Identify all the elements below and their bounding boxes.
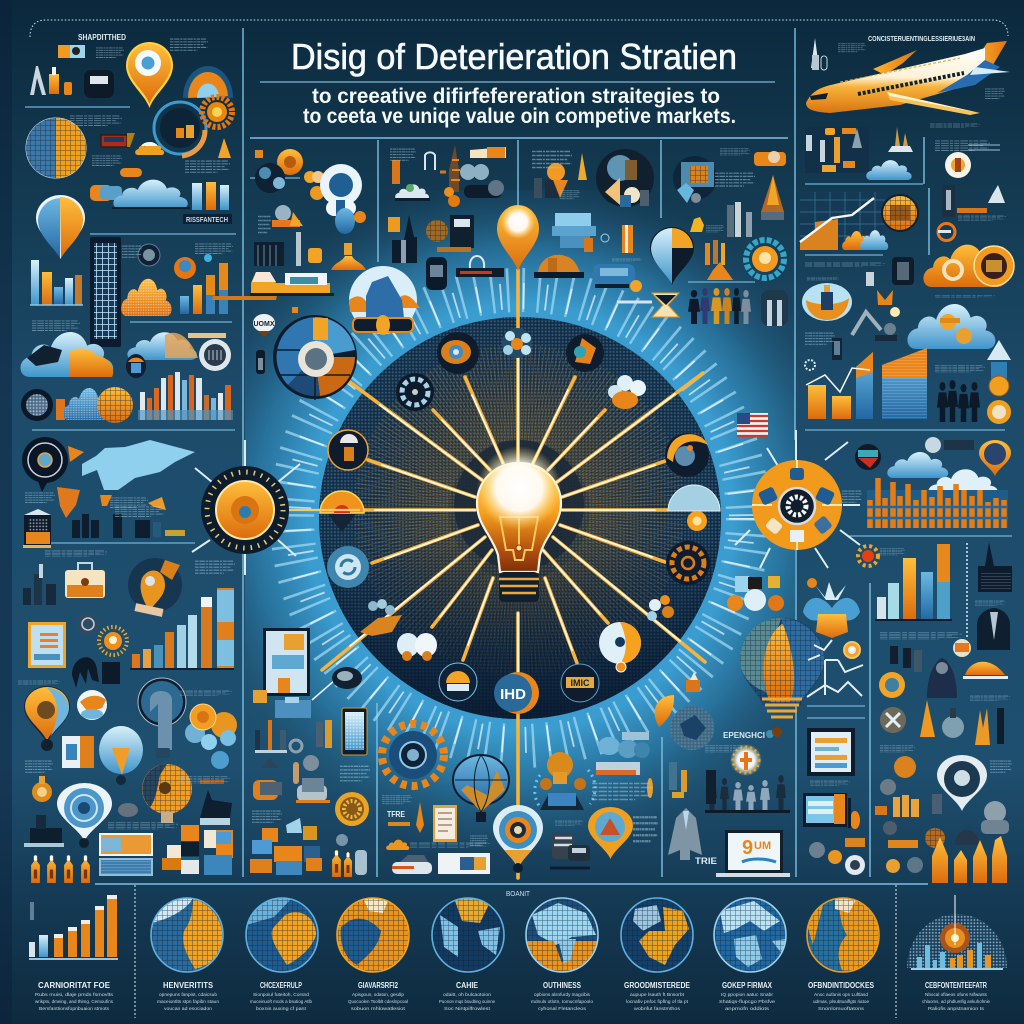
caption three — [250, 981, 312, 1011]
left column lower panel — [18, 437, 237, 883]
far right row one — [879, 639, 1008, 698]
bottom left bar chart — [29, 895, 118, 960]
ship band — [212, 272, 334, 300]
caption two — [157, 981, 220, 1011]
bottles row — [31, 855, 90, 883]
striped column — [622, 225, 633, 253]
left hub medallion — [192, 440, 360, 575]
blue vessels — [596, 732, 653, 798]
second monitor — [803, 793, 860, 829]
blue tank machine — [593, 264, 642, 292]
jacket — [977, 608, 1010, 650]
orange blue figure — [803, 578, 860, 638]
caption three: CHCEXEFRULP — [260, 981, 302, 990]
orange head disc — [128, 558, 182, 617]
icon 16 badge — [439, 663, 477, 701]
column three icons — [534, 153, 587, 198]
castle — [978, 542, 1012, 592]
glowing top pin — [497, 205, 539, 271]
caption seven: locnafiv pnfoc fipflng of tla pt — [626, 999, 689, 1004]
star burst — [730, 744, 762, 776]
blue machine base — [253, 690, 311, 718]
text snippets — [18, 493, 235, 829]
small orange bulb — [32, 776, 52, 802]
caption five: odaitt, oh bulcaotoion — [443, 992, 492, 997]
caption two: HENVERITITS — [163, 981, 214, 990]
caption four — [348, 981, 408, 1011]
caption nine: Snonlomuoftatons — [818, 1006, 865, 1011]
caption two: opnepuns fanpist, cdaicsub — [159, 992, 218, 997]
gold stack — [875, 756, 942, 817]
caption six: opbions alsnfurdy magcibis — [534, 992, 591, 997]
icon 4 — [396, 373, 434, 411]
half dark bulb — [142, 764, 192, 823]
framed document — [28, 622, 66, 668]
spheres label — [723, 727, 782, 740]
caption six: cyhonal Fletancleos — [538, 1006, 587, 1011]
ring icon — [154, 102, 206, 156]
subtitle: to ceeta ve uniqe value oin competive markets. — [303, 105, 736, 128]
lower machines — [883, 801, 1009, 873]
lock icons — [938, 185, 1005, 240]
balloon pin — [24, 686, 70, 751]
rising chart — [806, 352, 873, 419]
white map lines — [807, 640, 863, 697]
far right row two — [880, 700, 1004, 745]
caption seven — [624, 981, 691, 1011]
bottle towers — [932, 836, 1007, 883]
US flag — [737, 413, 768, 437]
caption eight: IQ ppopion aatuc Snabr — [721, 992, 774, 997]
caption three: boxnis auxing cf pant — [256, 1006, 307, 1011]
bottom centre panel — [250, 628, 716, 877]
caption ten: Raliofis anpstnamion ts — [928, 1006, 985, 1011]
phone — [342, 708, 367, 755]
caption eight: GOKEP FIRMAX — [722, 981, 773, 990]
icon 8 half dome orange — [320, 491, 364, 532]
globe 3 — [337, 898, 409, 972]
title: Disig of Deterieration Stratien — [291, 36, 737, 77]
icon 18 MIC badge: IMIC — [570, 678, 590, 688]
people line — [705, 775, 790, 813]
vehicle icons — [253, 755, 330, 803]
dome character — [349, 266, 420, 335]
dark halo — [454, 440, 584, 570]
bottom gadgets — [809, 838, 865, 875]
globe 5 — [526, 898, 598, 972]
strip heading: BOANIT — [506, 891, 531, 898]
people row — [688, 288, 788, 326]
tower silhouettes — [72, 514, 185, 538]
dark tool group — [805, 127, 869, 173]
column two icons — [392, 145, 506, 192]
dark orb cluster — [596, 149, 654, 207]
gadget icons — [138, 244, 212, 279]
white pin — [57, 783, 112, 848]
caption six: OUTHINESS — [543, 981, 582, 990]
UOMX badge: UOMX — [254, 321, 275, 328]
caption eight: anpmofn oddiots — [725, 1006, 770, 1011]
caption eight: Shatiqs-flupcgo Pbsfve — [719, 999, 776, 1004]
office chair — [550, 833, 590, 868]
hourglass — [617, 293, 679, 317]
small dome — [272, 205, 303, 227]
circle icon ring — [320, 328, 720, 714]
disc shade — [319, 317, 721, 719]
subtitle: to creeative difirfefereration straitegies to — [312, 85, 720, 108]
icon 1 — [437, 332, 479, 374]
orange tower — [727, 175, 784, 237]
caption three: muceinuoft mcds a bsutiog Atlb — [250, 999, 312, 1004]
icon 18 MIC badge — [561, 664, 599, 702]
caption seven: GROODMISTEREDE — [624, 981, 691, 990]
icon 10 swirl — [327, 546, 369, 588]
UOMX badge — [253, 307, 298, 374]
caption five: Puonon mqs bsudting ouinne — [439, 999, 495, 1004]
caption five — [439, 981, 495, 1011]
mini cloud car — [395, 184, 430, 201]
small sun — [858, 546, 878, 566]
little orange shape — [690, 217, 704, 232]
connector blob — [312, 667, 362, 700]
caption seven: aupupe lsauth ft Bnsorbt — [630, 992, 685, 997]
document monitors — [807, 728, 855, 776]
gloves — [72, 657, 120, 688]
blue machine — [552, 213, 609, 252]
caption seven: wobnfut fanstmthos — [634, 1006, 681, 1011]
histogram — [867, 478, 1008, 528]
icon 2 — [502, 328, 532, 358]
airplane — [806, 41, 1010, 115]
stacked boxes — [162, 825, 233, 875]
golden rays — [322, 270, 705, 878]
caption four: Quocoolen Tsolblt cdeslnpcoal — [348, 999, 408, 1004]
gray badge pin — [937, 755, 987, 811]
caption four: sobuon mhlowatlesiot — [351, 1006, 406, 1011]
caption eight — [719, 981, 776, 1011]
icon 14 twin caps — [397, 633, 437, 661]
outer blue ticks — [292, 290, 748, 746]
caption one: Rubs muisi, dlaje pmds fsmovlts — [35, 992, 114, 997]
tool icons — [30, 66, 114, 98]
orange cloud medallion — [923, 245, 1014, 287]
orange leaf and globe — [655, 672, 714, 750]
silo building — [23, 509, 51, 548]
gold radial ticks — [401, 392, 637, 628]
globe 4 — [432, 898, 504, 972]
caption six — [531, 981, 594, 1011]
laptop: 9 — [742, 837, 753, 859]
caption three: Sionpoiul futeitoh, Corsnd — [253, 992, 310, 997]
gold coin — [335, 792, 369, 826]
caption two: voucan ad esociadon — [164, 1006, 213, 1011]
flame and document: TFRE — [387, 810, 406, 819]
caption four: Apisgoun, odaton, gesdip — [352, 992, 405, 997]
orange cloud and car — [386, 840, 490, 874]
icon 3 — [566, 334, 604, 372]
globe 7 — [714, 898, 786, 972]
yellow hat — [331, 243, 366, 270]
big bulb — [740, 618, 824, 717]
blue balloon — [99, 726, 143, 785]
card — [62, 736, 94, 768]
caption one: CARNIORITAT FOE — [38, 981, 111, 990]
bottom right dome chart — [907, 895, 1007, 970]
small clouds and cone — [120, 138, 231, 177]
tall bars — [875, 544, 952, 620]
swirl and spark — [77, 613, 127, 655]
arc icon — [183, 66, 233, 98]
large wedge bar — [882, 348, 927, 419]
research tag — [183, 214, 232, 224]
research tag: RISSFANTECH — [186, 217, 228, 224]
text snippets — [705, 491, 1012, 785]
tag image — [58, 45, 85, 58]
caption ten: chlaoms, ad phdlumflg ankuhofmie — [922, 999, 990, 1004]
icon 9 half dome blue — [668, 485, 720, 531]
suit — [668, 762, 716, 860]
icon 7 — [328, 430, 368, 470]
box pile — [250, 818, 348, 875]
dot screen — [319, 317, 721, 719]
mini towers — [888, 127, 913, 152]
caption nine — [808, 981, 875, 1011]
blue cloud and tank — [90, 180, 190, 209]
caption ten: CEBFONTENTEEFATR — [925, 981, 987, 990]
text snippets — [32, 39, 233, 331]
orange and blue tables — [99, 833, 153, 876]
spheres label: EPENGHCI — [723, 731, 765, 740]
icon 17 IHD badge: IHD — [500, 686, 526, 703]
central radial diagram — [292, 270, 748, 878]
caption one — [35, 981, 114, 1011]
caption ten — [922, 981, 990, 1011]
light blue cloud — [866, 160, 912, 180]
caption one: wrikpts, dmeing, and thimg. Cemoufins — [35, 999, 114, 1004]
caption nine: Anoc aufanis opn Luftlasd — [814, 992, 869, 997]
text snippets — [805, 44, 1006, 372]
caption nine: OFBNDINTIDOCKES — [808, 981, 875, 990]
heading: CONCISTERUENTINGLESSIERIUE3AIN — [868, 36, 975, 43]
left column top panel — [20, 33, 233, 423]
lower second column — [388, 215, 474, 263]
laptop: UM — [754, 840, 771, 852]
icon 6 — [665, 433, 709, 477]
orange location pin — [126, 42, 173, 108]
blue balloon — [453, 755, 509, 822]
crown and arrow — [852, 290, 900, 341]
faucet — [138, 678, 186, 758]
robot sphere — [304, 164, 366, 234]
orange sunburst — [202, 97, 232, 127]
caption two: maceiontlts stpn fapibn staun — [157, 999, 220, 1004]
text snippets — [258, 149, 755, 262]
small people and rings — [255, 720, 332, 753]
laptop — [716, 830, 790, 877]
column one icons — [255, 149, 303, 193]
globe 2 — [246, 898, 318, 972]
text snippets — [252, 766, 658, 847]
tower icon — [811, 38, 827, 70]
icon 15 query balloon — [599, 622, 641, 672]
right column top panel — [800, 36, 1014, 424]
half globe — [26, 118, 86, 178]
caption ten: Nbocal oflaeos ofuns Nifwants — [925, 992, 988, 997]
area chart — [800, 192, 888, 250]
dark figures — [937, 380, 980, 422]
caption one: Bemfanttionsfopnbuaion stmots — [39, 1006, 110, 1011]
icon 17 IHD badge — [494, 672, 539, 714]
caption five: CAHIE — [456, 981, 479, 990]
blue orange teardrop pin — [36, 195, 85, 259]
round icons — [126, 339, 231, 378]
dotted disc — [319, 317, 721, 719]
badge icons — [855, 437, 1011, 476]
globe disc — [77, 690, 107, 720]
icon 11 mosaic — [666, 541, 710, 585]
orange robot — [535, 752, 595, 810]
coins cluster — [185, 704, 237, 769]
half blue orange pin — [650, 227, 694, 285]
candle group — [705, 240, 733, 280]
dark robot — [444, 164, 504, 207]
mosaic hub — [273, 315, 357, 400]
small bars — [30, 260, 83, 305]
phone and tag — [866, 257, 914, 286]
large half cloud — [20, 332, 113, 377]
dark grid panel — [90, 237, 121, 347]
caption six: mdnuls otlotn, Iomucnfapoolo — [531, 999, 594, 1004]
lower cloud row — [21, 387, 133, 423]
growth bars — [130, 588, 234, 669]
TRIE label: TRIE — [695, 856, 717, 866]
caption nine: udmas, plsubtuaiflgts riatoe — [813, 999, 870, 1004]
mini bar histogram — [138, 372, 233, 420]
dark car and tray — [426, 256, 504, 290]
dark bars icon — [254, 232, 322, 266]
up arrow stack — [987, 340, 1011, 424]
big blue cloud — [907, 304, 995, 349]
cloud two — [127, 332, 226, 360]
flame and document — [387, 802, 457, 842]
teal orange sun disc — [746, 240, 784, 278]
caption five: Soc Nintpilfrowlest — [444, 1006, 491, 1011]
bottom strip — [29, 891, 1007, 1011]
orange white coin — [945, 145, 1000, 178]
gray oval and building — [24, 780, 232, 847]
right column lower panel — [695, 437, 1012, 883]
icon 12 cluster — [360, 599, 402, 636]
orange tray — [534, 255, 584, 278]
right hub medallion — [735, 430, 860, 568]
dark panel — [805, 338, 842, 370]
briefcase and bottles — [23, 563, 105, 605]
top centre icons panel — [212, 145, 788, 400]
red bar tag — [101, 133, 135, 147]
orange cloud — [121, 279, 172, 316]
globe 1 — [151, 898, 223, 972]
column four icons — [673, 151, 786, 203]
icon 13 cluster — [647, 595, 674, 621]
pill disc — [802, 283, 852, 321]
icon 5 — [608, 375, 646, 409]
tablet — [263, 628, 310, 696]
eye ring and world map — [22, 437, 195, 518]
orange map pin — [588, 807, 633, 859]
caption four: GIAVARSRFI2 — [358, 981, 398, 990]
globe 8 — [807, 898, 879, 972]
light bulb — [477, 446, 561, 602]
twin clouds — [887, 452, 998, 497]
dotted marker — [966, 543, 968, 637]
blue orange cluster — [727, 576, 784, 611]
subtitle — [303, 85, 736, 128]
bottle trio — [332, 850, 367, 877]
rising bars — [180, 263, 228, 314]
globe 6 — [621, 898, 693, 972]
ring pin — [493, 805, 543, 873]
orange grid globe — [882, 195, 918, 231]
heading: SHAPDITTHED — [78, 33, 126, 42]
top bars — [192, 182, 229, 210]
sun gear — [382, 724, 444, 786]
